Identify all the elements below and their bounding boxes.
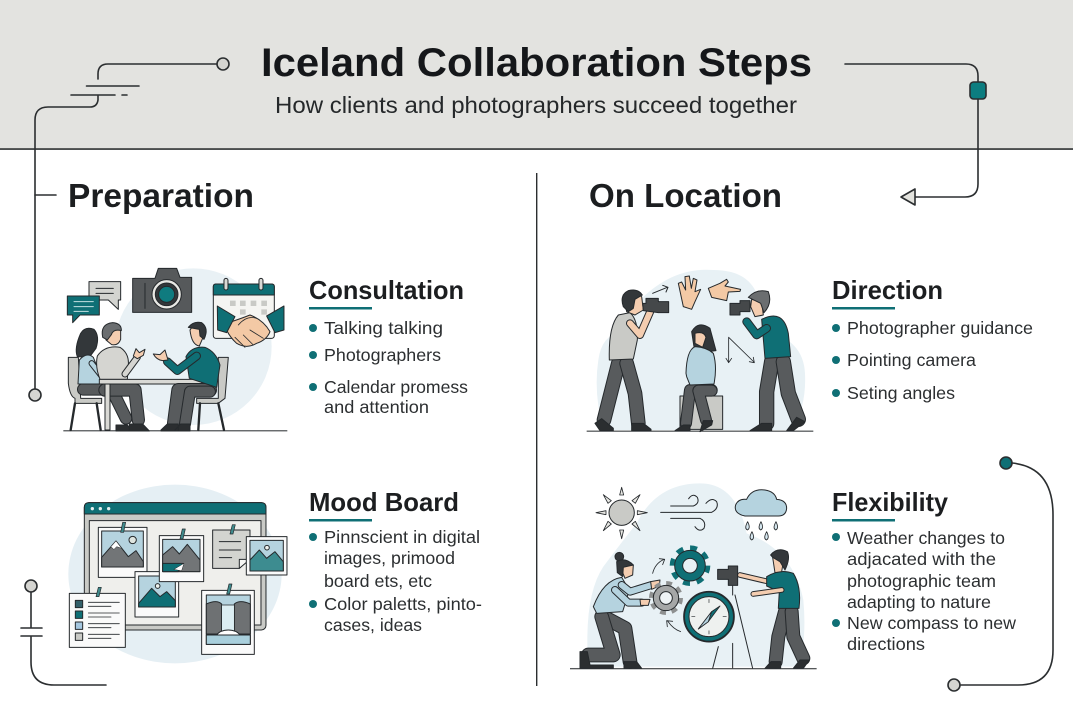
icon: speech bubbles [67, 282, 121, 323]
text block: Mood Board: Color paletts, pinto- [324, 594, 482, 614]
text block: Direction: Pointing camera [847, 350, 976, 370]
text block: Consultation: and attention [324, 397, 429, 417]
illustration: consultation [63, 268, 287, 431]
photo 4 [246, 537, 287, 575]
icon: calendar with handshake [213, 278, 284, 347]
text block: Direction [832, 275, 1033, 403]
illustration: direction [587, 270, 813, 432]
connector: bottom left [21, 580, 106, 685]
text block: Flexibility: Weather changes to [847, 528, 1005, 548]
text block: Consultation: Calendar promess [324, 377, 468, 397]
kneeling woman [580, 552, 660, 668]
text block: Consultation: Photographers [324, 345, 441, 365]
photo 3 [159, 529, 204, 582]
man [740, 550, 809, 668]
camera on tripod [713, 566, 753, 668]
connector: bottom right [948, 457, 1053, 691]
illustration: flexibility [570, 483, 817, 669]
waterfall photo [202, 584, 254, 654]
note [213, 525, 250, 568]
title: Iceland Collaboration Steps [261, 41, 812, 85]
gear: gray [651, 583, 681, 613]
photo 2 [135, 572, 179, 617]
text block: Direction: Direction [832, 275, 943, 305]
icon: compass [684, 591, 734, 642]
text block: Mood Board: board ets, etc [324, 571, 432, 591]
left photographer [595, 290, 669, 431]
icon: sun [596, 487, 647, 539]
heading: On Location: On Location [589, 177, 782, 214]
seated subject [675, 325, 723, 432]
arrows [653, 559, 681, 632]
text block: Flexibility: adjacated with the [847, 549, 996, 569]
header band [0, 0, 1073, 150]
chairs [68, 357, 228, 430]
checklist [69, 587, 125, 647]
text block: Flexibility: Flexibility [832, 487, 949, 517]
text block: Flexibility: New compass to new [847, 613, 1016, 633]
connector: left circuit line [29, 58, 229, 401]
woman seated [76, 328, 133, 431]
icon: wind [661, 495, 717, 530]
gear: teal [672, 548, 708, 583]
text block: Consultation [309, 275, 468, 417]
connector: right arrow line [845, 64, 986, 205]
text block: Mood Board: cases, ideas [324, 615, 422, 635]
text block: Flexibility [832, 487, 1016, 654]
text block: Mood Board: Mood Board [309, 487, 459, 517]
text block: Mood Board [309, 487, 482, 635]
text block: Direction: Photographer guidance [847, 318, 1033, 338]
subtitle: How clients and photographers succeed together [275, 92, 797, 118]
text block: Mood Board: Pinnscient in digital [324, 527, 480, 547]
angle arrows [726, 337, 754, 363]
pointing hand [708, 279, 741, 301]
text block: Consultation: Consultation [309, 275, 464, 305]
heading: Preparation: Preparation [68, 177, 254, 214]
text block: Mood Board: images, primood [324, 548, 455, 568]
text block: Flexibility: directions [847, 634, 925, 654]
photo 1 [98, 522, 147, 577]
text block: Consultation: Talking talking [324, 318, 443, 338]
man seated beside her [97, 323, 149, 431]
icon: rain cloud [735, 490, 787, 540]
table [99, 379, 202, 430]
hand [653, 276, 701, 309]
center divider [536, 173, 537, 686]
ground line [63, 429, 287, 432]
right photographer [730, 291, 805, 431]
browser window [84, 503, 266, 630]
man seated right [153, 322, 220, 431]
illustration: mood board [68, 485, 287, 663]
text block: Flexibility: adapting to nature [847, 592, 991, 612]
icon: camera [133, 268, 192, 312]
text block: Flexibility: photographic team [847, 571, 996, 591]
text block: Direction: Seting angles [847, 383, 955, 403]
